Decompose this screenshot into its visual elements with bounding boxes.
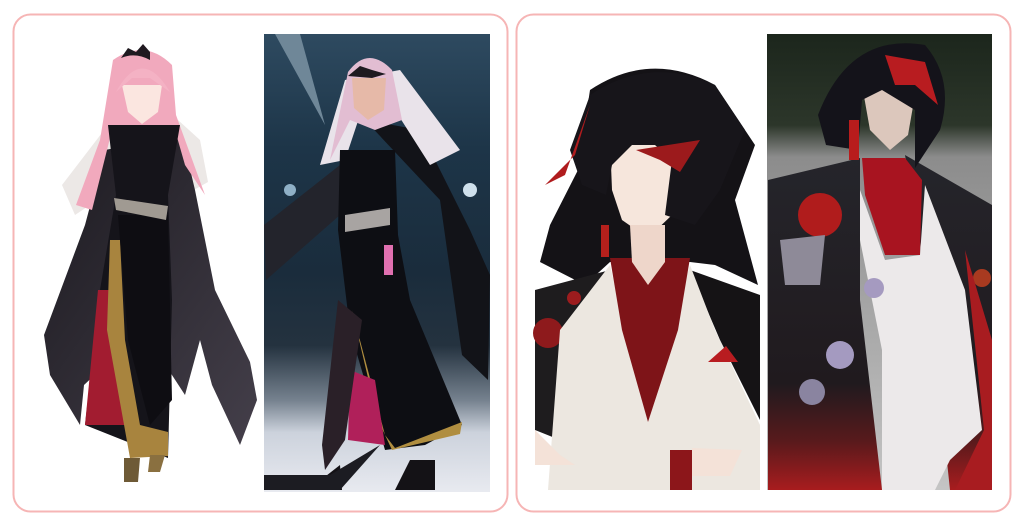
- face: [610, 140, 680, 238]
- red shirt: [862, 158, 922, 255]
- panel: left card: [14, 14, 508, 512]
- gold trim: [107, 240, 168, 458]
- black skirt overlay: [118, 215, 172, 425]
- face: [122, 85, 162, 124]
- fringe: [116, 68, 170, 92]
- dress: [338, 150, 462, 450]
- arm cuff: [670, 450, 692, 490]
- hair red streaks: [545, 105, 590, 185]
- gold trim: [352, 310, 462, 450]
- face: [862, 85, 915, 150]
- flowers: [798, 193, 842, 237]
- dress: [85, 125, 180, 458]
- pocket square: [708, 346, 738, 362]
- belt: [345, 208, 390, 232]
- photo: cosplayer with pink hair: [264, 34, 490, 492]
- tiara: [121, 44, 150, 60]
- red flower: [533, 318, 563, 348]
- hair: [76, 50, 205, 210]
- white jacket: [548, 265, 760, 490]
- jacket dark side: [535, 270, 610, 440]
- tassel: [384, 245, 393, 275]
- tail: [264, 445, 380, 490]
- face: [352, 78, 386, 120]
- illustration: pink-haired character: [44, 44, 257, 482]
- red lining: [955, 250, 992, 490]
- illustration: black-haired character in white suit: [533, 69, 760, 490]
- dress red lining: [85, 290, 126, 425]
- cape: [365, 120, 490, 380]
- photo: cosplayer with black and red hair: [767, 34, 992, 490]
- hair red streak: [885, 55, 938, 105]
- hair back: [540, 69, 758, 285]
- red shirt: [610, 258, 690, 422]
- white clothes: [860, 185, 982, 490]
- hair: [330, 58, 402, 160]
- neck: [630, 225, 665, 285]
- cape: [44, 135, 257, 445]
- shoes: [308, 465, 342, 490]
- belt: [114, 198, 168, 220]
- hand: [692, 448, 742, 476]
- boots: [124, 458, 140, 482]
- leg: [322, 300, 362, 470]
- panel: right card: [516, 14, 1010, 512]
- veil: [320, 70, 460, 165]
- pink lining: [348, 370, 385, 445]
- kimono: [768, 158, 882, 490]
- hair front: [570, 72, 745, 225]
- hair: [818, 43, 945, 168]
- veil: [62, 120, 208, 215]
- earring: [849, 120, 859, 160]
- tiara: [348, 66, 386, 78]
- earring: [601, 225, 609, 257]
